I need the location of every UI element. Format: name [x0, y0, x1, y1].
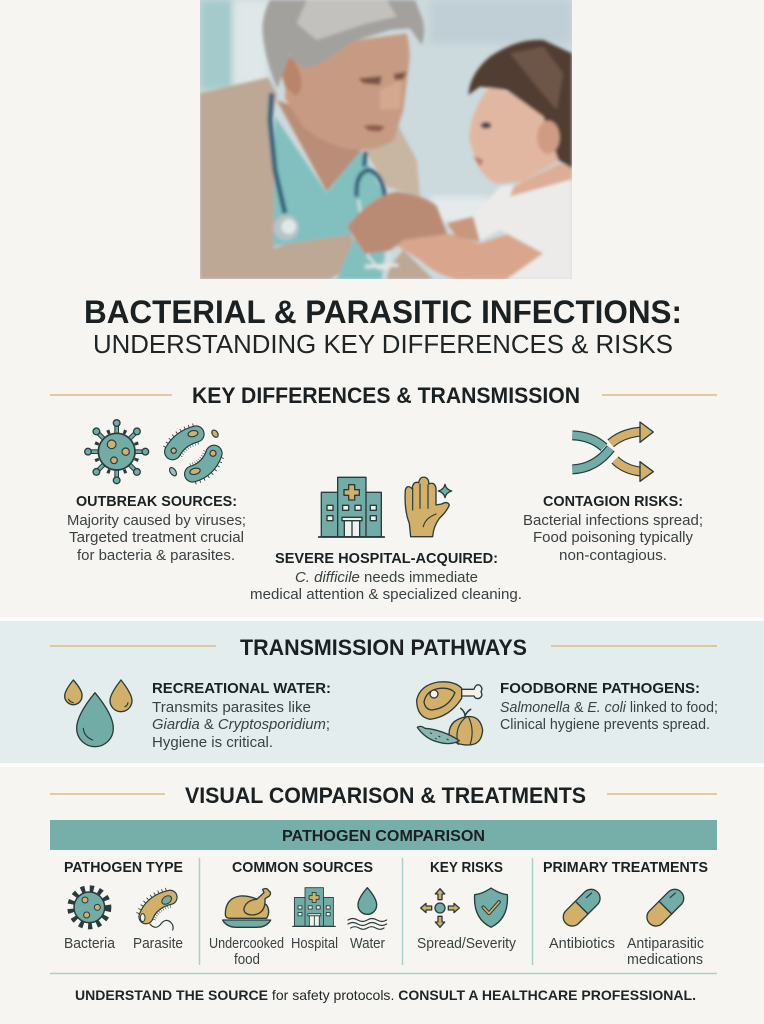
icon: water drops — [65, 680, 132, 747]
column: primary treatments: Antibiotics — [549, 936, 615, 952]
text: contagion risks: CONTAGION RISKS: — [543, 493, 683, 510]
icon: antibiotic capsule — [563, 889, 600, 926]
column: key risks: Spread/Severity — [417, 936, 517, 952]
panel: transmission pathways — [0, 617, 764, 767]
column: common sources — [209, 859, 387, 968]
icon: crossing arrows — [572, 422, 653, 481]
text: severe hospital-acquired: C. difficile needs immediate — [295, 569, 478, 586]
footer call to action: UNDERSTAND THE SOURCE for safety protocols. CONSULT A HEALTHCARE PROFESSIONAL. — [75, 987, 696, 1003]
column: primary treatments: Antiparasitic — [627, 936, 704, 952]
column: key risks — [417, 859, 517, 952]
icon: antiparasitic capsule — [647, 889, 684, 926]
text: outbreak sources: Targeted treatment crucial — [69, 529, 244, 546]
column: common sources: Hospital — [291, 936, 338, 952]
title: BACTERIAL & PARASITIC INFECTIONS: — [84, 294, 682, 330]
column: pathogen type — [64, 859, 183, 952]
text: foodborne pathogens: FOODBORNE PATHOGENS: — [500, 680, 700, 697]
text: outbreak sources: OUTBREAK SOURCES: — [76, 493, 237, 510]
text: contagion risks — [523, 493, 703, 564]
column: primary treatments: medications — [627, 952, 703, 968]
icon: roast turkey — [223, 889, 271, 927]
icon: spreading arrows — [421, 889, 459, 927]
icon: parasite — [140, 894, 173, 930]
icon: hospital — [319, 477, 384, 537]
text: recreational water: Giardia & Cryptosporidium; — [152, 716, 330, 733]
table: pathogen comparison — [50, 820, 717, 974]
title — [84, 294, 682, 359]
text: severe hospital-acquired: medical attention & specialized cleaning. — [250, 586, 522, 603]
text: recreational water: Hygiene is critical. — [152, 734, 273, 751]
column: pathogen type: Bacteria — [64, 936, 116, 952]
icon: food (steak, pumpkin, cucumber) — [417, 682, 483, 745]
column: primary treatments — [543, 859, 708, 968]
column: common sources: food — [234, 952, 260, 968]
title: UNDERSTANDING KEY DIFFERENCES & RISKS — [93, 329, 673, 359]
text: contagion risks: non-contagious. — [559, 547, 667, 564]
text: severe hospital-acquired — [250, 550, 522, 603]
text: severe hospital-acquired: SEVERE HOSPITAL-ACQUIRED: — [275, 550, 498, 567]
text: outbreak sources: for bacteria & parasites. — [77, 547, 235, 564]
text: recreational water: RECREATIONAL WATER: — [152, 680, 331, 697]
text: recreational water: Transmits parasites like — [152, 699, 311, 716]
column: common sources: COMMON SOURCES — [232, 859, 373, 876]
text: contagion risks: Bacterial infections spread; — [523, 512, 703, 529]
text: foodborne pathogens: Salmonella & E. coli linked to food; — [500, 699, 718, 716]
column: key risks: KEY RISKS — [430, 859, 503, 876]
heading: transmission pathways: TRANSMISSION PATHWAYS — [240, 635, 527, 660]
heading: key differences & transmission: KEY DIFFERENCES & TRANSMISSION — [192, 383, 580, 408]
icon: gloved hand with sparkle — [405, 477, 452, 537]
icon: shield with check — [475, 888, 507, 927]
column: primary treatments: PRIMARY TREATMENTS — [543, 859, 708, 876]
table header band: PATHOGEN COMPARISON — [282, 828, 485, 845]
icon: hospital — [293, 888, 335, 926]
table header band — [50, 820, 717, 850]
text: outbreak sources: Majority caused by viruses; — [67, 512, 246, 529]
icon: water drop with waves — [348, 888, 387, 929]
text: contagion risks: Food poisoning typically — [533, 529, 693, 546]
column: pathogen type: PATHOGEN TYPE — [64, 859, 183, 876]
icon: virus — [85, 420, 149, 484]
icon: bacteria — [168, 429, 219, 477]
heading: visual comparison & treatments: VISUAL COMPARISON & TREATMENTS — [185, 783, 586, 808]
column: common sources: Undercooked — [209, 936, 284, 952]
text: recreational water — [152, 680, 331, 751]
column: common sources: Water — [350, 936, 385, 952]
text: foodborne pathogens — [500, 680, 718, 733]
text: outbreak sources — [67, 493, 246, 564]
text: foodborne pathogens: Clinical hygiene prevents spread. — [500, 716, 710, 733]
icon: bacteria — [71, 889, 108, 926]
photo: grandmother clinician comforting a toddler — [200, 0, 572, 279]
column: pathogen type: Parasite — [133, 936, 183, 952]
